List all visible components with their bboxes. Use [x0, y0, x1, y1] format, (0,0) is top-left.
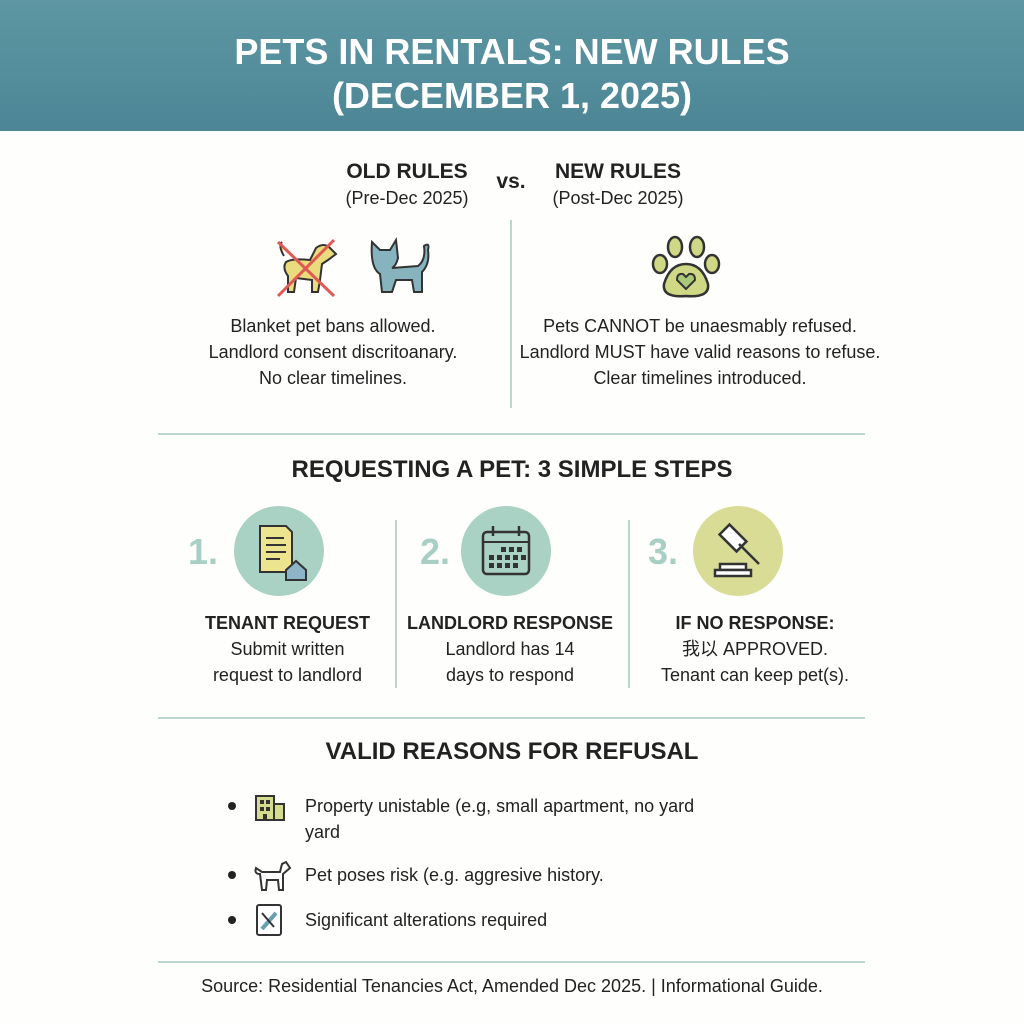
header — [0, 0, 1024, 131]
step 3 — [648, 506, 849, 685]
header: PETS IN RENTALS: NEW RULES — [234, 31, 790, 72]
old rules heading: (Pre-Dec 2025) — [345, 188, 469, 208]
reason 2 — [228, 860, 604, 891]
reason 1 — [228, 795, 694, 842]
new rules heading — [552, 160, 684, 208]
old rules text: Blanket pet bans allowed. — [230, 316, 436, 336]
step 1: Submit written — [230, 639, 345, 659]
new rules text: Landlord MUST have valid reasons to refuse. — [520, 342, 880, 362]
refusal heading: VALID REASONS FOR REFUSAL — [326, 738, 698, 765]
old rules heading — [345, 160, 469, 208]
step 1: 1. — [188, 531, 218, 572]
footer source: Source: Residential Tenancies Act, Amended Dec 2025. | Informational Guide. — [201, 976, 823, 996]
reason 1: Property unistable (e.g, small apartment, no yard — [305, 796, 694, 816]
new rules heading: NEW RULES — [555, 160, 681, 183]
step 1: request to landlord — [213, 665, 362, 685]
new rules text: Clear timelines introduced. — [593, 368, 807, 388]
reason 3: Significant alterations required — [305, 910, 547, 930]
reason 1: yard — [305, 822, 340, 842]
step 2: 2. — [420, 531, 450, 572]
steps heading: REQUESTING A PET: 3 SIMPLE STEPS — [292, 456, 732, 483]
icon: document with tools — [256, 904, 282, 936]
icon: gavel — [693, 506, 783, 596]
new rules text — [520, 316, 880, 388]
step 2 — [407, 506, 613, 685]
icon: building — [255, 795, 285, 821]
new rules heading: (Post-Dec 2025) — [552, 188, 684, 208]
icon: crossed dog — [277, 239, 338, 298]
reason 2: Pet poses risk (e.g. aggresive history. — [305, 865, 604, 885]
old rules text: No clear timelines. — [259, 368, 407, 388]
old rules text — [209, 316, 457, 388]
header: (DECEMBER 1, 2025) — [332, 75, 692, 116]
step 3: IF NO RESPONSE: — [675, 613, 835, 633]
icon: cat — [370, 237, 430, 293]
step 2: LANDLORD RESPONSE — [407, 613, 613, 633]
icon: dog — [254, 860, 292, 891]
step 3: 3. — [648, 531, 678, 572]
step 2: Landlord has 14 — [445, 639, 575, 659]
old rules text: Landlord consent discritoanary. — [209, 342, 457, 362]
icon: calendar — [461, 506, 551, 596]
new rules text: Pets CANNOT be unaesmably refused. — [543, 316, 857, 336]
reason 3 — [228, 904, 547, 936]
step 3: Tenant can keep pet(s). — [661, 665, 849, 685]
step 1: TENANT REQUEST — [205, 613, 370, 633]
step 1 — [188, 506, 370, 685]
vs label: vs. — [496, 170, 526, 193]
icon: paw heart — [652, 236, 720, 298]
step 2: days to respond — [446, 665, 574, 685]
step 3: 我以 APPROVED. — [682, 639, 828, 659]
icon: document — [234, 506, 324, 596]
old rules heading: OLD RULES — [346, 160, 468, 183]
